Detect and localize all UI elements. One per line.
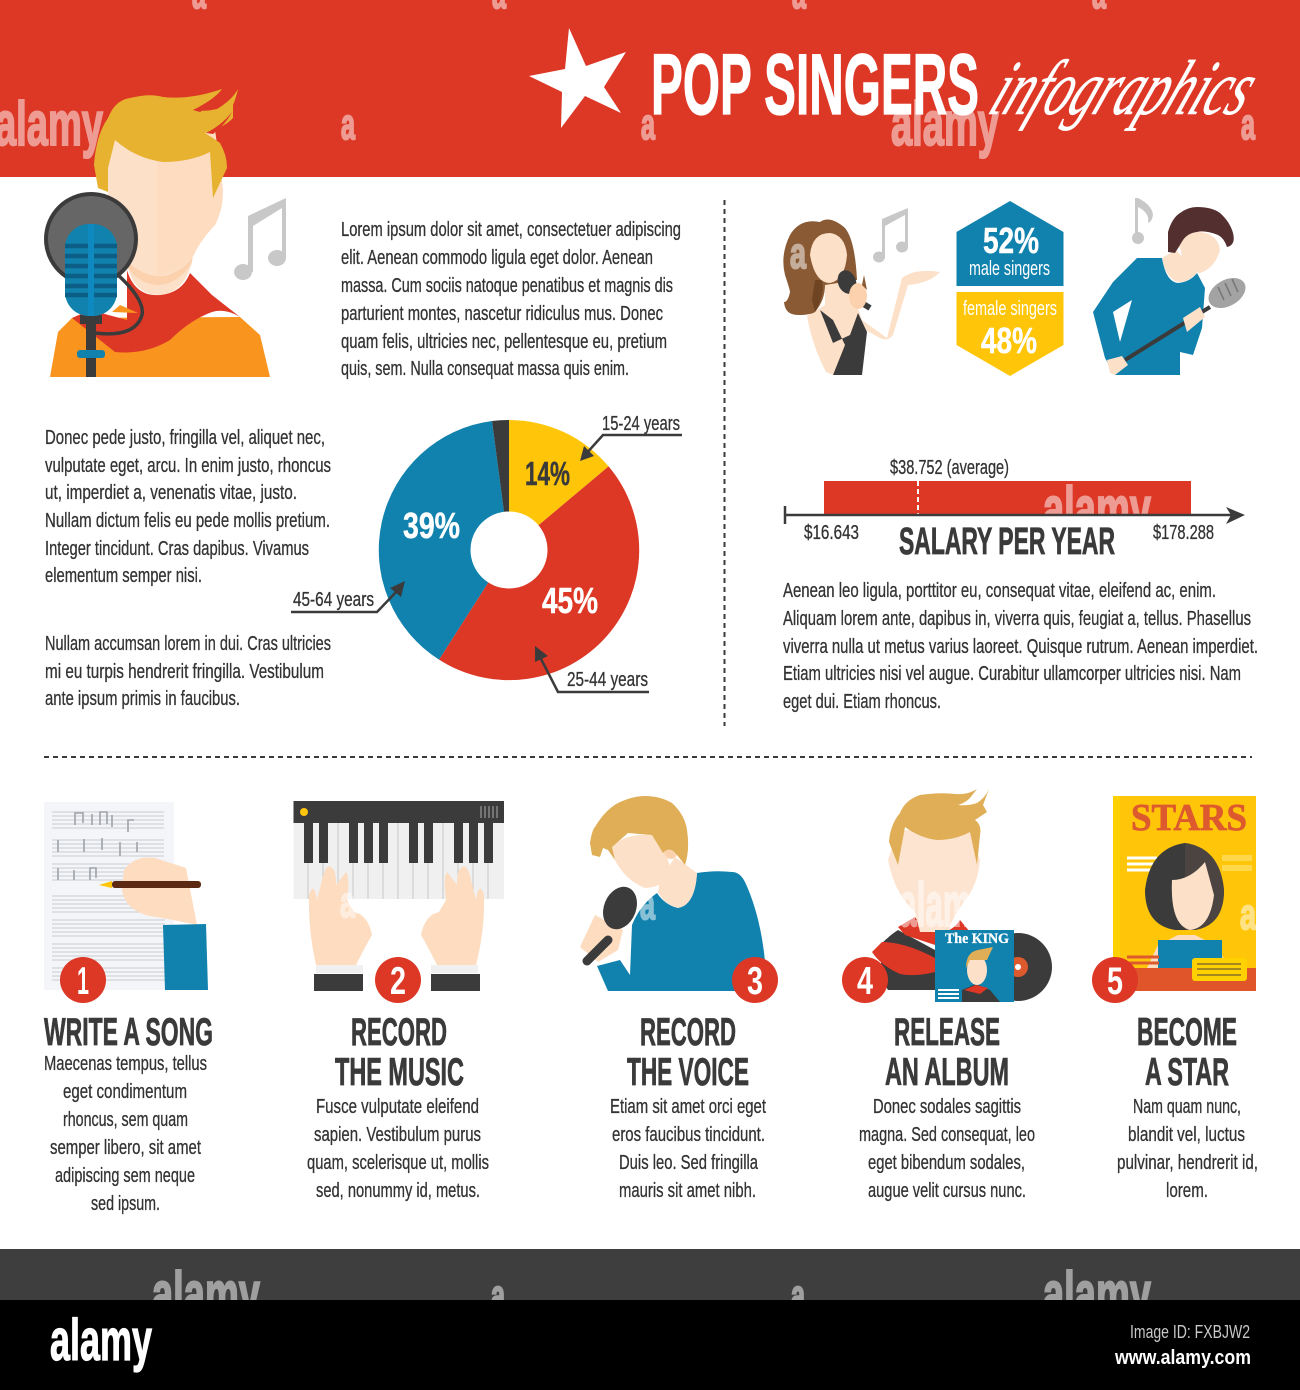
step 2 illustration: record the music <box>294 801 504 991</box>
heading: record the music: RECORD <box>351 1011 447 1054</box>
badge: step 1 <box>60 957 106 1003</box>
watermarks over illustrations <box>340 229 1256 939</box>
badge: male singers 52%: 52% <box>983 220 1039 261</box>
text block: step 3 <box>610 1096 766 1202</box>
title: POP SINGERS <box>651 37 979 133</box>
text block: intro: quis, sem. Nulla consequat massa quis enim. <box>341 358 629 380</box>
text block: audience description: ante ipsum primis in faucibus. <box>45 688 240 710</box>
label: 45-64 years <box>291 581 405 612</box>
album cover <box>935 930 1014 1002</box>
step 3 illustration: record the voice <box>580 796 767 991</box>
text block: audience description: Donec pede justo, fringilla vel, aliquet nec, <box>45 427 325 449</box>
text block: step 5: lorem. <box>1166 1180 1208 1202</box>
stock credit bar: alamy <box>50 1308 152 1373</box>
badge: female singers 48%: 48% <box>981 320 1037 361</box>
step 4 illustration: release an album: alam <box>899 871 971 940</box>
text block: step 4: augue velit cursus nunc. <box>868 1180 1026 1202</box>
icon: music notes <box>234 198 286 280</box>
text block: intro: parturient montes, nascetur ridiculus mus. Donec <box>341 303 663 325</box>
text block: step 3: eros faucibus tincidunt. <box>612 1124 765 1146</box>
heading: write a song: WRITE A SONG <box>44 1011 213 1054</box>
badge: step 1: 1 <box>77 960 89 1003</box>
text block: step 2: sed, nonummy id, metus. <box>316 1180 480 1202</box>
text block: audience description: vulputate eget, arcu. In enim justo, rhoncus <box>45 455 331 477</box>
badge: male singers 52%: male singers <box>969 258 1050 280</box>
text block: step 1: sed ipsum. <box>91 1193 160 1215</box>
badge: step 5: 5 <box>1107 960 1123 1003</box>
text block: intro: quam felis, ultricies nec, pellentesque eu, pretium <box>341 331 667 353</box>
label: maximum salary: $178.288 <box>1153 522 1214 544</box>
heading: record the voice: THE VOICE <box>627 1051 749 1094</box>
label: minimum salary: $16.643 <box>804 522 859 544</box>
text block: step 5 <box>1117 1096 1258 1202</box>
text block: step 4: eget bibendum sodales, <box>868 1152 1025 1174</box>
badge: step 4: 4 <box>857 960 873 1003</box>
chart: salary per year bar: alamy <box>1043 475 1151 544</box>
text block: step 2: quam, scelerisque ut, mollis <box>307 1152 489 1174</box>
text block: step 1: semper libero, sit amet <box>50 1137 201 1159</box>
label: 45-64 years: 45-64 years <box>293 589 374 611</box>
heading: become a star <box>1137 1011 1237 1094</box>
header band: alamy <box>891 90 999 159</box>
text block: step 1: Maecenas tempus, tellus <box>44 1053 207 1075</box>
text block: intro: massa. Cum sociis natoque penatibus et magnis dis <box>341 275 673 297</box>
text block: step 1: rhoncus, sem quam <box>63 1109 188 1131</box>
icon: star <box>529 28 626 128</box>
step 4 illustration: release an album <box>872 789 1052 1002</box>
text block: step 3: Duis leo. Sed fringilla <box>619 1152 759 1174</box>
footer band: a <box>791 1271 805 1320</box>
text block: salary description <box>783 580 1258 713</box>
icon: music note <box>1132 198 1153 244</box>
heading: salary per year: SALARY PER YEAR <box>899 521 1115 563</box>
text block: step 1 <box>44 1053 207 1215</box>
text block: audience description: Nullam dictum felis eu pede mollis pretium. <box>45 510 330 532</box>
chart: age donut: 14% <box>525 455 570 492</box>
badge: step 3 <box>732 957 778 1003</box>
text block: audience description: ut, imperdiet a, venenatis vitae, justo. <box>45 482 297 504</box>
text block: intro: Lorem ipsum dolor sit amet, consectetuer adipiscing <box>341 219 681 241</box>
header band: alamy <box>0 90 103 159</box>
badge: male singers 52% <box>956 201 1064 286</box>
badge: step 3: 3 <box>747 960 763 1003</box>
text block: step 5: pulvinar, hendrerit id, <box>1117 1152 1258 1174</box>
step 5 illustration: magazine cover <box>1113 796 1256 991</box>
text block: step 3: mauris sit amet nibh. <box>619 1180 756 1202</box>
album cover: The KING <box>945 931 1009 947</box>
step 5 illustration: magazine cover: STARS <box>1131 797 1247 839</box>
chart: age donut: 39% <box>403 505 460 546</box>
text block: step 2: sapien. Vestibulum purus <box>314 1124 481 1146</box>
heading: record the music <box>335 1011 464 1094</box>
text block: audience description: Nullam accumsan lorem in dui. Cras ultricies <box>45 633 331 655</box>
heading: release an album: AN ALBUM <box>885 1051 1009 1094</box>
microphone <box>65 224 117 377</box>
text block: audience description <box>45 427 331 710</box>
illustration: female singer <box>783 220 940 375</box>
text block: step 4: Donec sodales sagittis <box>873 1096 1021 1118</box>
chart: age donut: 45% <box>542 580 598 621</box>
header band: a <box>641 100 655 149</box>
watermarks over illustrations: a <box>790 229 806 278</box>
text block: step 5: Nam quam nunc, <box>1133 1096 1241 1118</box>
text block: audience description: Integer tincidunt. Cras dapibus. Vivamus <box>45 538 309 560</box>
heading: record the voice: RECORD <box>640 1011 736 1054</box>
stock credit bar <box>0 1300 1300 1390</box>
text block: intro <box>341 219 681 380</box>
text block: step 4: magna. Sed consequat, leo <box>859 1124 1035 1146</box>
chart: age donut <box>291 413 682 692</box>
text block: intro: elit. Aenean commodo ligula eget dolor. Aenean <box>341 247 653 269</box>
text block: salary description: eget dui. Etiam rhoncus. <box>783 691 941 713</box>
watermarks over illustrations: a <box>1240 890 1256 939</box>
stock credit bar: Image ID: FXBJW2 <box>1130 1322 1250 1342</box>
heading: release an album: RELEASE <box>894 1011 1000 1054</box>
footer band <box>0 1249 1300 1329</box>
footer band: a <box>491 1271 505 1320</box>
watermarks over illustrations: a <box>340 878 355 927</box>
text block: step 2 <box>307 1096 489 1202</box>
badge: female singers 48%: female singers <box>963 298 1057 320</box>
icon: music notes <box>873 208 908 262</box>
chart: salary per year bar <box>785 457 1245 563</box>
illustration: singer at studio microphone <box>44 89 270 377</box>
watermarks over illustrations: a <box>640 880 655 929</box>
label: 25-44 years: 25-44 years <box>567 669 648 691</box>
label: 15-24 years <box>580 413 682 461</box>
header band: a <box>1241 100 1255 149</box>
text block: step 5: blandit vel, luctus <box>1128 1124 1245 1146</box>
text block: step 2: Fusce vulputate eleifend <box>316 1096 479 1118</box>
badge: step 2: 2 <box>390 960 406 1003</box>
footer band: alamy <box>1043 1260 1151 1329</box>
microphone pop filter <box>44 192 138 286</box>
label: 15-24 years: 15-24 years <box>602 413 680 435</box>
text block: step 3: Etiam sit amet orci eget <box>610 1096 766 1118</box>
badge: step 4 <box>842 957 888 1003</box>
badge: step 5 <box>1092 957 1138 1003</box>
text block: audience description: mi eu turpis hendrerit fringilla. Vestibulum <box>45 661 324 683</box>
label: average salary: $38.752 (average) <box>890 457 1009 479</box>
label: 25-44 years <box>535 646 649 692</box>
badge: step 2 <box>375 957 421 1003</box>
header band <box>0 0 1300 177</box>
stock credit bar: www.alamy.com <box>1114 1347 1251 1369</box>
illustration: male singer <box>1093 207 1251 375</box>
text block: step 4 <box>859 1096 1035 1202</box>
footer band: alamy <box>152 1260 260 1329</box>
text block: audience description: elementum semper nisi. <box>45 565 202 587</box>
header band: a <box>341 100 355 149</box>
badge: female singers 48% <box>956 292 1064 376</box>
step 1 illustration: write a song <box>44 802 208 990</box>
heading: become a star: A STAR <box>1145 1051 1229 1094</box>
text block: step 1: adipiscing sem neque <box>55 1165 195 1187</box>
heading: release an album <box>885 1011 1009 1094</box>
heading: record the voice <box>627 1011 749 1094</box>
heading: record the music: THE MUSIC <box>335 1051 464 1094</box>
text block: step 1: eget condimentum <box>63 1081 187 1103</box>
